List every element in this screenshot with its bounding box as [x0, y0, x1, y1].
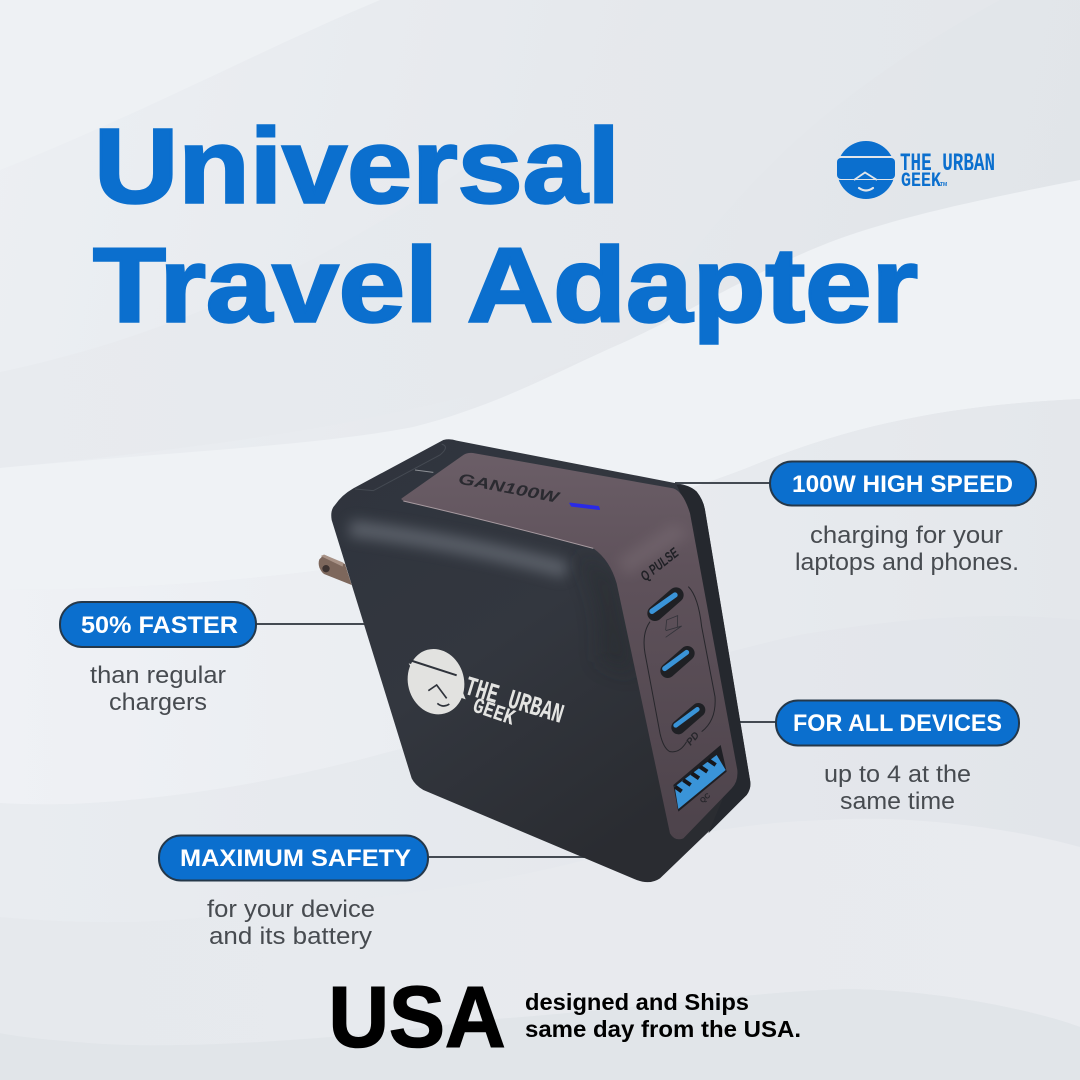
footer text — [525, 989, 801, 1042]
callout text: chargers — [109, 689, 207, 716]
indicator LED — [570, 503, 599, 509]
callout: 100W high speed: 100W HIGH SPEED — [792, 471, 1013, 498]
folded plug outline — [355, 444, 445, 491]
icon: geek head with visor — [836, 141, 896, 199]
callout: for all devices: FOR ALL DEVICES — [793, 710, 1002, 737]
mauve panel — [401, 453, 737, 839]
USB-A port — [673, 745, 727, 812]
footer text: same day from the USA. — [525, 1016, 801, 1042]
panel edge light — [403, 501, 593, 548]
title: Travel Adapter — [93, 226, 918, 344]
label: QC: QC — [698, 790, 713, 805]
folded plug slit — [415, 470, 433, 472]
right edge shade — [677, 485, 750, 833]
callout text — [795, 522, 1019, 576]
callout text: and its battery — [209, 923, 372, 950]
callout text: charging for your — [810, 522, 1003, 549]
callout: 100W high speed — [770, 462, 1036, 576]
label: Q PULSE: Q PULSE — [637, 544, 682, 584]
connector lines — [256, 483, 776, 857]
logo wordmark: GEEK — [901, 170, 941, 193]
callout text: for your device — [207, 896, 375, 923]
product: charger — [319, 439, 750, 882]
logo: The Urban Geek — [836, 141, 995, 199]
callout text — [207, 896, 375, 950]
callout text — [90, 662, 226, 716]
title — [93, 108, 918, 344]
callout text: than regular — [90, 662, 226, 689]
USB-C ports — [652, 595, 698, 727]
laptop icon — [666, 616, 682, 637]
logo wordmark: TM — [940, 182, 947, 188]
callout: 50% faster: 50% FASTER — [81, 612, 238, 639]
title: Universal — [94, 108, 620, 226]
footer text: designed and Ships — [525, 989, 749, 1015]
USB-C port 2 — [665, 652, 687, 671]
body logo head — [400, 643, 472, 721]
callout text: up to 4 at the — [824, 761, 971, 788]
callout: maximum safety: MAXIMUM SAFETY — [180, 845, 411, 872]
callout text: laptops and phones. — [795, 549, 1019, 576]
logo wordmark: THE URBAN — [900, 149, 995, 178]
callout text: same time — [840, 788, 955, 815]
USB-C port 3 — [676, 709, 698, 727]
body logo text — [461, 672, 567, 732]
footer: USA: USA — [328, 970, 506, 1066]
label: GAN100W: GAN100W — [457, 471, 562, 507]
body logo — [400, 643, 567, 732]
body logo text: THE URBAN — [461, 672, 567, 732]
plug prong — [319, 555, 352, 585]
callout: maximum safety — [159, 836, 428, 950]
callout text — [824, 761, 971, 815]
front highlight — [350, 528, 567, 570]
port outline group — [644, 587, 715, 752]
footer: USA — [328, 970, 801, 1066]
logo wordmark — [900, 149, 995, 193]
callout: 50% faster — [60, 602, 256, 716]
callout: for all devices — [776, 700, 1019, 815]
USB-C port 1 — [652, 595, 676, 613]
panel highlight — [617, 523, 690, 577]
corner shade — [577, 553, 633, 673]
label: PD: PD — [685, 730, 702, 748]
body logo text: GEEK — [469, 694, 518, 732]
charger body — [331, 439, 750, 882]
